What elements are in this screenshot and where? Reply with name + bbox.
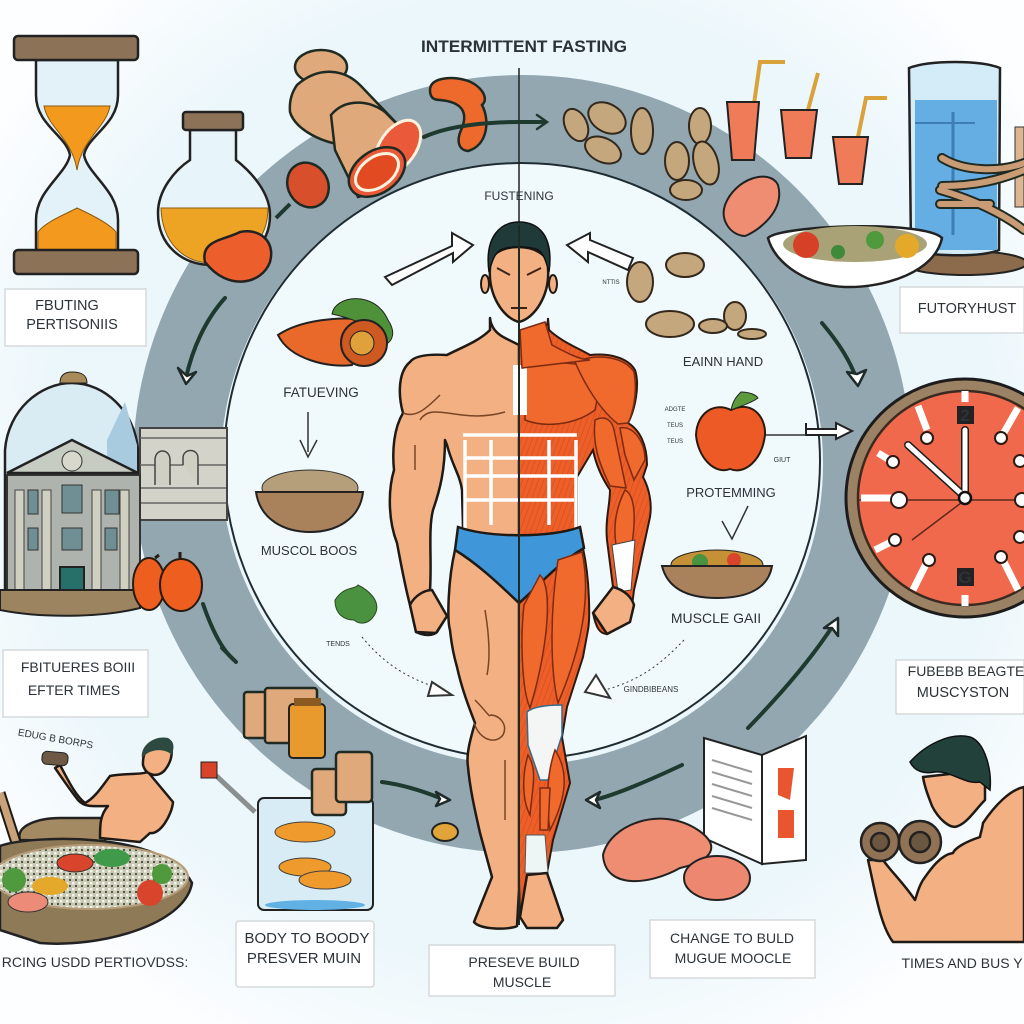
dumbbell — [861, 821, 941, 863]
apple side labels: ADGTE — [665, 407, 685, 413]
label: muscle system — [896, 660, 1024, 714]
icon: apple — [696, 392, 765, 470]
label: preserve build: MUSCLE — [493, 974, 551, 990]
body figure — [390, 222, 651, 929]
icon: carrots — [278, 299, 393, 366]
label: tends: TENDS — [326, 641, 350, 648]
label: small right: GINDBIBEANS — [624, 685, 678, 694]
label: bottom right: TIMES AND BUS Y — [901, 955, 1023, 971]
skin half of body — [390, 318, 519, 929]
hair — [910, 736, 990, 790]
label: eain hand: EAINN HAND — [683, 354, 763, 369]
arrow: check down — [722, 506, 748, 539]
icon: orange sausage — [430, 78, 486, 151]
icon: flask — [158, 112, 290, 282]
icon: clock — [846, 379, 1024, 617]
label: change to build: CHANGE TO BULD — [670, 930, 794, 946]
arrow: lower left — [203, 604, 236, 662]
center line — [518, 225, 520, 925]
label: change to build — [650, 920, 815, 978]
icon: nuts inner — [627, 253, 766, 339]
label: small nut note: NTTIS — [602, 280, 620, 286]
icon: small food bowl — [432, 823, 458, 841]
chest line skin — [403, 395, 505, 470]
label: fatueving: FATUEVING — [283, 385, 359, 400]
label: bottom left: RCING USDD PERTIOVDSS: — [2, 954, 188, 970]
arrow: to dumbbell — [748, 618, 838, 728]
abs — [463, 435, 577, 530]
leg muscles — [522, 552, 585, 873]
icon: museum under glass dome — [0, 372, 140, 616]
icon: salad plate — [768, 226, 942, 287]
icon: meat rolls — [279, 50, 430, 215]
label: fasting periods: PERTISONIIS — [26, 317, 118, 333]
icon: hourglass — [14, 36, 138, 274]
icon: annex building — [140, 428, 227, 520]
icon: jars and blocks — [244, 688, 325, 758]
muscle half of body — [519, 318, 651, 928]
icon: water glass with branches — [903, 62, 1024, 275]
fists — [410, 587, 634, 634]
icon: man with dumbbell in bowl — [0, 737, 192, 944]
center axis line — [518, 68, 520, 225]
arrow: to museum — [178, 298, 225, 384]
icon: ham steaks — [603, 819, 750, 900]
icon: clock: G — [958, 568, 972, 587]
icon: salad bowl — [662, 550, 772, 598]
label: gait: GIUT — [774, 457, 791, 464]
apple side labels: TEUS — [667, 439, 683, 445]
label: dumbbell small: EDUG B BORPS — [17, 728, 94, 752]
arrow: upper right hollow — [567, 233, 633, 270]
arrow: dashed to leg — [362, 637, 452, 696]
right foot — [520, 873, 563, 928]
label: body to body — [236, 921, 374, 987]
label: muscle system: MUSCYSTON — [917, 685, 1009, 701]
inner heading: FUSTENING — [484, 189, 554, 203]
arrow: upper left hollow — [385, 233, 473, 285]
arrow: to clock — [822, 323, 866, 386]
ears — [481, 275, 557, 293]
label: muscle system: FUBEBB BEAGTE — [908, 663, 1024, 679]
label: after times: FBITUERES BOIII — [21, 659, 135, 675]
label: preserve build: PRESEVE BUILD — [468, 954, 580, 970]
arrow: down — [300, 412, 317, 457]
arrow: dashed to right leg — [585, 640, 684, 698]
icon: steak — [724, 177, 779, 236]
head — [490, 247, 548, 322]
icon: apples left — [133, 552, 202, 611]
arm and torso — [868, 787, 1024, 942]
label: protemming: PROTEMMING — [686, 485, 776, 500]
icon: water container with fish — [201, 752, 373, 910]
label: preserve build — [429, 945, 615, 996]
apple side labels: TEUS — [667, 423, 683, 429]
icon: nuts — [559, 96, 723, 200]
arrow: top exchange — [424, 115, 547, 137]
briefs — [455, 527, 584, 603]
icon: clock: 2 — [960, 406, 970, 425]
title: INTERMITTENT FASTING — [421, 38, 627, 56]
chest and arm muscles — [525, 357, 645, 592]
hair — [488, 222, 550, 272]
neck muscle — [520, 322, 590, 368]
label: after times: EFTER TIMES — [28, 682, 120, 698]
label: muscol boos: MUSCOL BOOS — [261, 543, 357, 558]
label: fasting periods — [5, 289, 146, 346]
label: fasting periods: FBUTING — [35, 298, 99, 314]
gray cycle ring — [177, 119, 867, 809]
label: body to body: BODY TO BOODY — [244, 930, 370, 947]
eyes and mouth — [497, 268, 541, 308]
label: future: FUTORYHUST — [918, 301, 1016, 317]
inner pale circle — [224, 163, 820, 759]
apple side labels — [665, 407, 685, 445]
left knee — [474, 610, 505, 820]
sternum — [513, 365, 527, 415]
label: after times — [3, 650, 148, 717]
arrow: to book — [586, 765, 682, 808]
icon: man lifting dumbbell right — [861, 736, 1024, 942]
icon: leaf — [335, 585, 377, 623]
icon: juice glasses — [727, 62, 887, 184]
label: body to body: PRESVER MUIN — [247, 950, 361, 967]
arrow: to bowl — [382, 782, 450, 806]
icon: open book — [704, 736, 806, 864]
label: future — [900, 287, 1024, 333]
label: change to build: MUGUE MOOCLE — [675, 950, 791, 966]
icon: grain bowl — [256, 470, 363, 532]
label: muscle gain: MUSCLE GAII — [671, 610, 761, 626]
head — [923, 770, 985, 827]
arrow: apple to clock — [766, 423, 852, 439]
